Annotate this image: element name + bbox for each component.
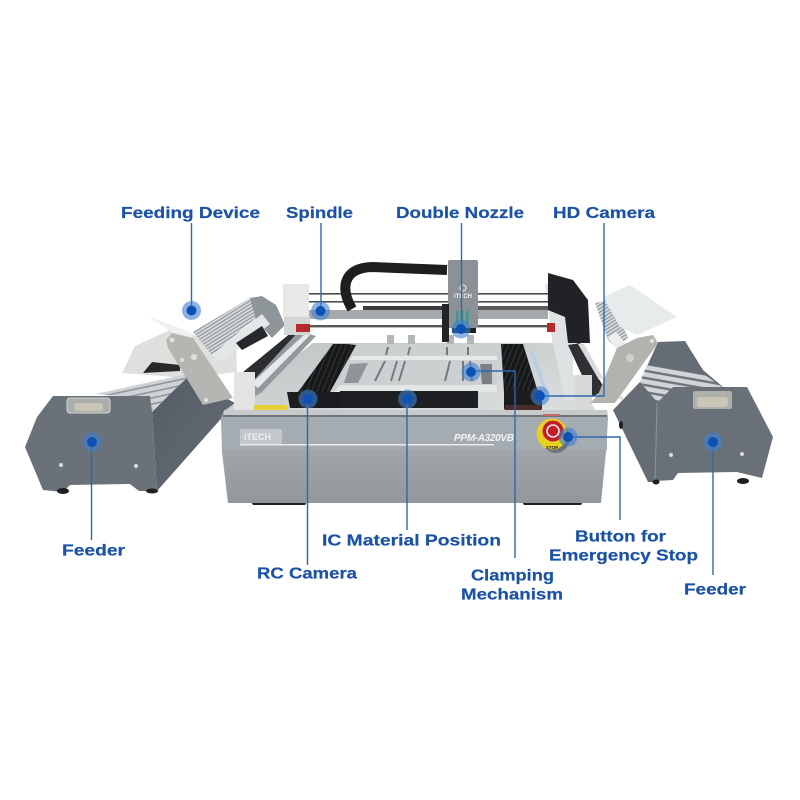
label: Button for Emergency Stop: Button for xyxy=(575,528,666,546)
label: Feeding Device: Feeding Device xyxy=(121,205,260,222)
feeder rear panel xyxy=(640,341,723,400)
label: Button for Emergency Stop: Emergency Stop xyxy=(549,548,698,564)
placement head xyxy=(442,260,478,342)
iTECH logo xyxy=(240,429,282,444)
iTECH logo: iTECH xyxy=(244,432,271,442)
leader: IC Material Position xyxy=(398,390,417,530)
right gantry chain xyxy=(547,273,590,343)
leader: right Feeder xyxy=(704,432,722,575)
emergency stop button xyxy=(536,414,570,453)
emergency stop button: STOP xyxy=(546,445,558,450)
right feeder xyxy=(590,285,773,484)
leader: Clamping Mechanism xyxy=(462,362,515,558)
cable chain top xyxy=(345,267,447,309)
leader: Button for Emergency Stop xyxy=(558,428,620,520)
feeder side panel xyxy=(152,377,235,491)
feeder front panel xyxy=(655,387,773,481)
left feeder xyxy=(25,296,285,494)
feeder handle xyxy=(67,398,110,413)
label: Button for Emergency Stop xyxy=(549,528,698,564)
right linear guide xyxy=(545,283,605,413)
label: Spindle: Spindle xyxy=(286,205,353,222)
label: IC Material Position: IC Material Position xyxy=(322,532,501,550)
feeding device roller xyxy=(150,296,285,362)
feeder slats xyxy=(640,365,722,403)
placement head: iTECH xyxy=(454,294,472,300)
feeder feet xyxy=(57,488,158,494)
leader: Spindle xyxy=(311,223,330,320)
label: left Feeder: Feeder xyxy=(62,542,125,560)
feeder feet xyxy=(619,421,749,484)
left black feeder strip xyxy=(298,344,356,392)
leader: Double Nozzle xyxy=(452,223,470,338)
machine xyxy=(221,260,608,505)
feeder rear hood xyxy=(122,330,237,378)
label: right Feeder: Feeder xyxy=(684,582,746,598)
deck xyxy=(223,343,597,412)
label: Clamping Mechanism: Clamping xyxy=(471,568,554,584)
machine feet xyxy=(252,499,582,505)
leader: HD Camera xyxy=(530,223,604,406)
leader: Feeding Device xyxy=(182,223,201,320)
front body xyxy=(221,410,608,503)
leader: RC Camera xyxy=(298,390,318,565)
left linear guide xyxy=(234,330,316,412)
model name: PPM-A320VB xyxy=(454,433,514,444)
gantry rails xyxy=(308,293,548,327)
paper label sheet xyxy=(603,285,677,335)
label: HD Camera: HD Camera xyxy=(553,205,655,222)
front black bars xyxy=(287,390,542,410)
centre fixture xyxy=(334,335,497,392)
feeder handle xyxy=(693,391,732,409)
right black feeder strip xyxy=(501,344,538,392)
feeder front panel xyxy=(25,396,157,492)
label: Clamping Mechanism xyxy=(461,568,563,604)
left gantry block xyxy=(283,284,310,335)
feeder slats xyxy=(95,374,187,411)
label: Double Nozzle: Double Nozzle xyxy=(396,205,524,222)
roller xyxy=(595,300,628,350)
side mounting plate xyxy=(166,333,233,405)
label: Clamping Mechanism: Mechanism xyxy=(461,586,563,604)
feeder side panel xyxy=(613,382,658,482)
side mounting plate xyxy=(590,335,658,403)
leader: left Feeder xyxy=(82,432,102,540)
label: RC Camera: RC Camera xyxy=(257,566,357,582)
